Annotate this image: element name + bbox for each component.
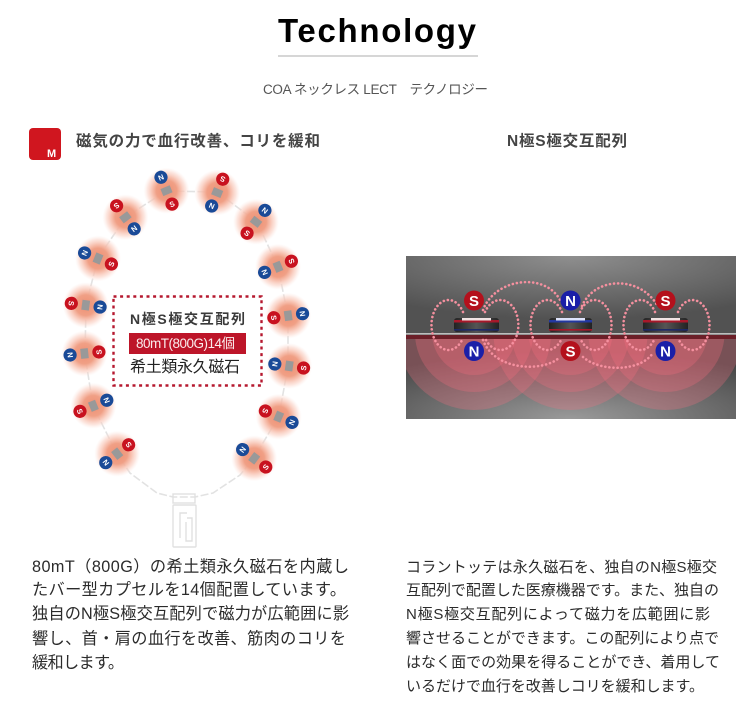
text block: right: N極S極交互配列によって磁力を広範囲に影 (406, 605, 710, 623)
text block: left: 緩和します。 (32, 654, 124, 672)
text block: left: 80mT（800G）の希土類永久磁石を内蔵し (32, 558, 349, 576)
heading: left column: 磁気の力で血行改善、コリを緩和 (76, 131, 320, 150)
text block: right: はなく面での効果を得ることができ、着用して (406, 654, 720, 671)
center label box: 80mT(800G)14個 (136, 336, 235, 351)
subtitle: COA ネックレス LECT テクノロジー (263, 82, 488, 97)
icon: red M badge (29, 128, 61, 160)
pole labels (464, 290, 676, 361)
chain (85, 191, 288, 497)
pole labels: S (469, 293, 479, 310)
magnets (59, 161, 315, 491)
magnet discs (454, 318, 688, 332)
field rings (406, 339, 736, 410)
necklace diagram (59, 161, 315, 547)
center label box: 希土類永久磁石 (130, 358, 240, 376)
text block: right: コラントッテは永久磁石を、独自のN極S極交 (406, 559, 717, 576)
pole labels: N (469, 344, 479, 360)
text block: right: 響させることができます。この配列により点で (406, 630, 719, 647)
center label box: N極S極交互配列 (130, 311, 245, 327)
heading: right column: N極S極交互配列 (507, 131, 627, 150)
magnetic field diagram (397, 256, 742, 419)
title: Technology (278, 12, 477, 49)
pole labels: S (565, 344, 576, 360)
text block: right (406, 559, 720, 695)
text block: right: いるだけで血行を改善しコリを緩和します。 (406, 678, 704, 695)
text block: left: 響し、首・肩の血行を改善、筋肉のコリを (32, 630, 346, 648)
field lines (431, 282, 710, 368)
text block: left (32, 558, 349, 672)
surface line (406, 335, 736, 339)
pole labels: S (660, 293, 671, 310)
center label box (114, 296, 262, 386)
text block: right: 互配列で配置した医療機器です。また、独自の (406, 582, 719, 599)
text block: left: 独自のN極S極交互配列で磁力が広範囲に影 (32, 605, 349, 623)
text block: left: たバー型カプセルを14個配置しています。 (32, 581, 346, 599)
pole labels: N (660, 344, 671, 360)
pendant (173, 494, 196, 547)
icon: red M badge: M (47, 148, 56, 160)
pole labels: N (565, 293, 576, 310)
